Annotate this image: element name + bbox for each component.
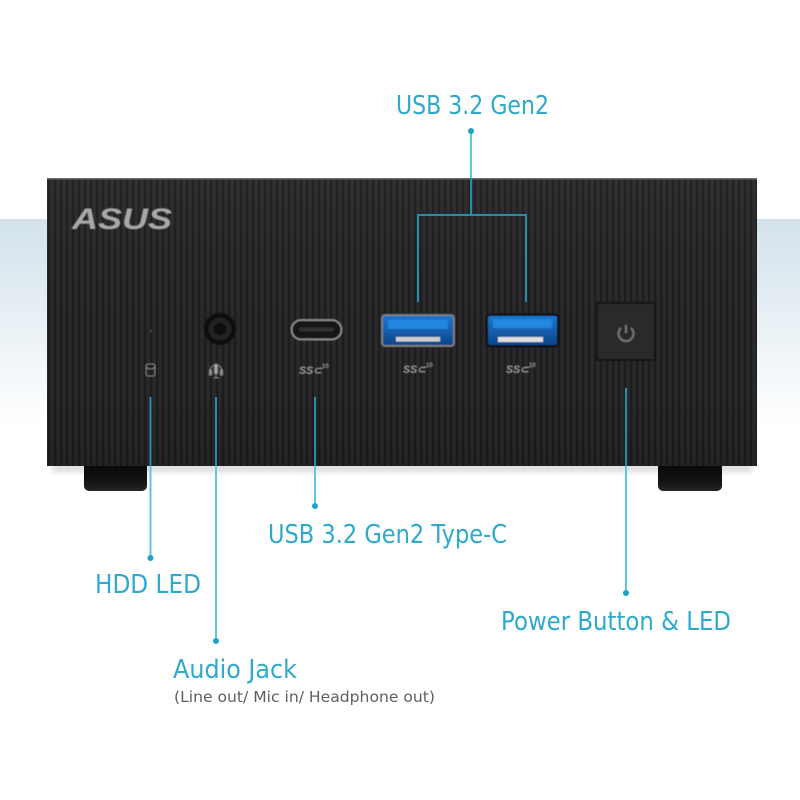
device shadow [52, 464, 752, 472]
USB-C port [292, 320, 342, 340]
label: HDD LED: HDD LED [95, 570, 201, 600]
USB port right [487, 315, 558, 346]
device body [47, 178, 757, 466]
right foot [658, 460, 722, 491]
power button [597, 303, 655, 360]
callout line: Audio Jack [213, 397, 219, 644]
icon: SS10 label type-C: 10 [322, 364, 329, 370]
audio jack [204, 313, 236, 345]
ASUS logo: ASUS [71, 203, 172, 236]
callout line: HDD LED [148, 397, 154, 561]
HDD LED indicator [150, 330, 152, 332]
icon: microphone headset [210, 364, 222, 378]
icon: SS10 label right: 10 [529, 363, 536, 369]
left foot [84, 460, 147, 491]
USB port left [382, 315, 454, 346]
callout line: USB 3.2 Gen2 [418, 128, 526, 302]
label: Power Button & LED: Power Button & LED [501, 607, 731, 637]
mini PC device [47, 178, 757, 491]
icon: power [619, 325, 634, 341]
icon: SS10 label right: SS⊂ [506, 364, 530, 376]
callout line: USB Type-C [312, 397, 318, 509]
label: Audio Jack note: (Line out/ Mic in/ Headphone out) [174, 688, 435, 706]
icon: SS10 label type-C: SS⊂ [299, 365, 323, 377]
icon: SS10 label left: 10 [426, 363, 433, 369]
background gradient band [0, 219, 800, 424]
label: USB 3.2 Gen2: USB 3.2 Gen2 [396, 91, 549, 121]
label: Audio Jack: Audio Jack [173, 655, 297, 685]
icon: HDD [146, 364, 155, 376]
icon: SS10 label left: SS⊂ [403, 364, 427, 376]
callout line: Power Button [623, 388, 629, 596]
label: USB 3.2 Gen2 Type-C: USB 3.2 Gen2 Type-C [268, 520, 507, 550]
